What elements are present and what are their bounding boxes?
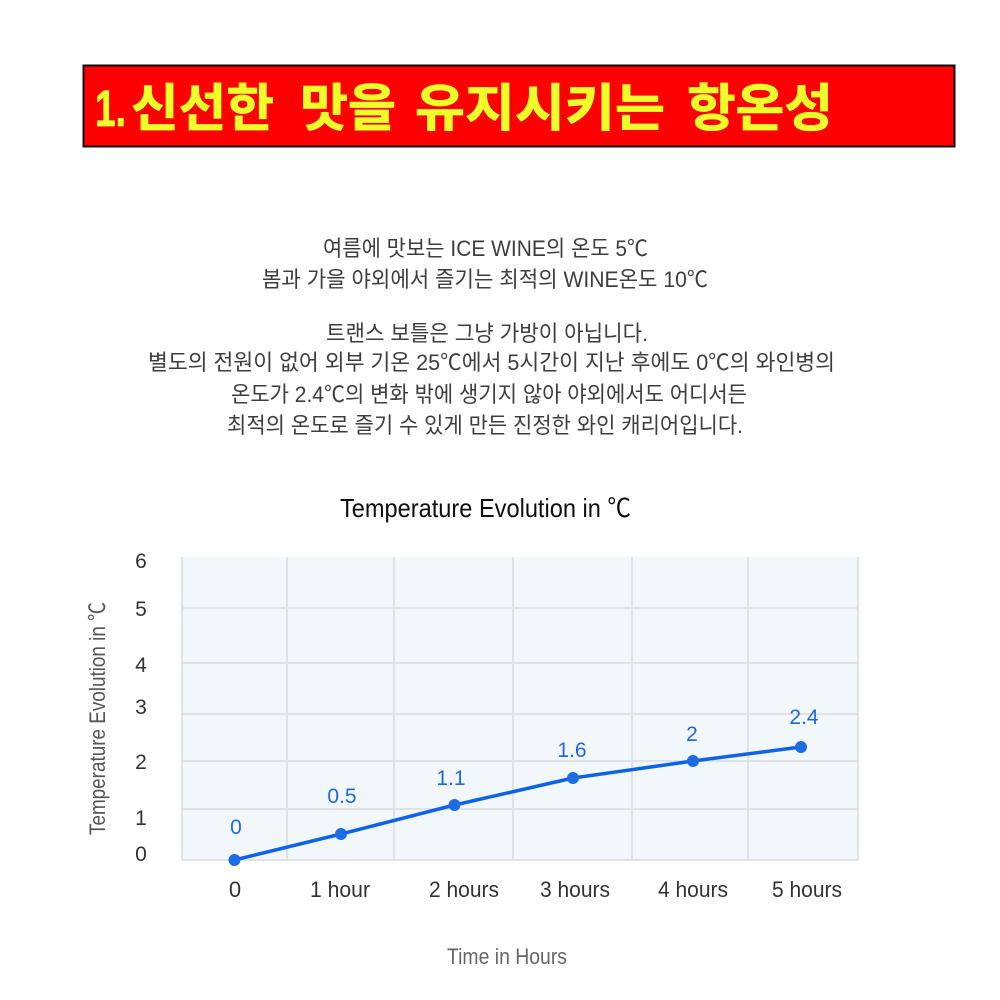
title: 신선한: [131, 80, 274, 137]
title: 유지시키는: [415, 80, 665, 137]
title: [95, 80, 833, 137]
x axis title: Time in Hours: [447, 944, 567, 969]
line chart: [85, 550, 858, 969]
y axis title: Temperature Evolution in ℃: [85, 602, 110, 835]
title: 1.: [95, 80, 126, 137]
y axis labels: 1: [135, 807, 147, 830]
y axis labels: [135, 550, 147, 866]
y axis labels: 2: [135, 751, 147, 774]
x axis labels: 1 hour: [310, 877, 370, 902]
title: 항온성: [687, 80, 833, 137]
body text: carrier description: 최적의 온도로 즐기 수 있게 만든 진정한 와인 캐리어입니다.: [227, 413, 743, 438]
body text: carrier description: 온도가 2.4℃의 변화 밖에 생기지 않아 야외에서도 어디서든: [231, 382, 747, 407]
title banner: [84, 66, 954, 146]
intro text: wine temperatures: 봄과 가을 야외에서 즐기는 최적의 WINE온도 10℃: [262, 267, 708, 292]
x axis labels: [229, 877, 842, 902]
data labels: 2.4: [789, 706, 819, 729]
data labels: 0: [230, 816, 242, 839]
y axis labels: 6: [135, 550, 147, 573]
plot area: [182, 557, 858, 860]
x axis labels: 0: [229, 877, 241, 902]
body text: carrier description: [148, 321, 835, 438]
y axis labels: 5: [135, 598, 147, 621]
title: 맛을: [300, 80, 396, 137]
body text: carrier description: 별도의 전원이 없어 외부 기온 25℃에서 5시간이 지난 후에도 0℃의 와인병의: [148, 350, 835, 375]
x axis labels: 4 hours: [658, 877, 728, 902]
data labels: 1.1: [436, 767, 466, 790]
body text: carrier description: 트랜스 보틀은 그냥 가방이 아닙니다.: [326, 321, 648, 346]
y axis labels: 0: [135, 843, 147, 866]
intro text: wine temperatures: [262, 236, 708, 292]
data labels: [230, 706, 819, 839]
data line: [234, 747, 801, 860]
y axis labels: 4: [135, 654, 147, 677]
y axis labels: 3: [135, 696, 147, 719]
data labels: 0.5: [327, 785, 357, 808]
x axis labels: 2 hours: [429, 877, 499, 902]
data points: [228, 741, 807, 866]
data labels: 1.6: [557, 739, 587, 762]
chart title: Temperature Evolution in ℃: [340, 493, 631, 523]
x axis labels: 5 hours: [772, 877, 842, 902]
data labels: 2: [686, 723, 698, 746]
intro text: wine temperatures: 여름에 맛보는 ICE WINE의 온도 5℃: [323, 236, 648, 261]
x axis labels: 3 hours: [540, 877, 610, 902]
